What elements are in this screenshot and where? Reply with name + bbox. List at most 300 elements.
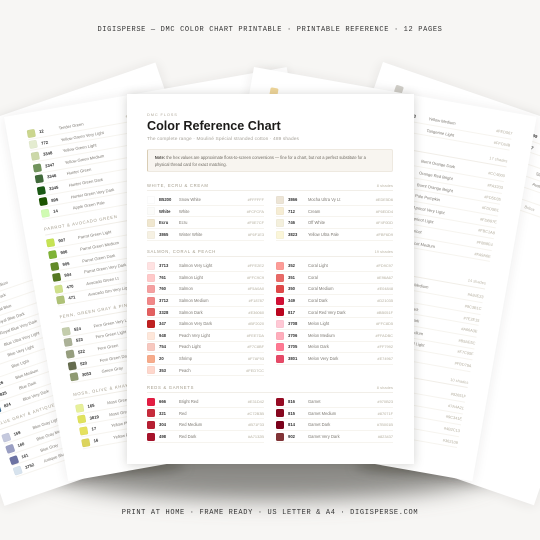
heading: 19 shades	[375, 249, 393, 254]
swatch rows	[520, 131, 540, 218]
left column swatches: #BF2020	[248, 321, 264, 326]
swatch rows: Copper	[397, 292, 411, 299]
panel: inner right page (oranges and golds)	[190, 67, 537, 481]
swatch rows: Golden Browns	[382, 379, 410, 389]
right column swatches: #E96A67	[377, 275, 393, 280]
swatch rows: #FA3203	[487, 182, 503, 190]
right column swatches: Melon Light	[308, 321, 329, 326]
swatch rows: #362109	[443, 437, 458, 445]
swatch rows: 900	[401, 156, 409, 162]
swatch: yellow	[269, 87, 279, 96]
left column swatches: #F7AF93	[248, 356, 264, 361]
left column swatches: 3865	[159, 232, 168, 237]
section: copper and golds	[243, 238, 486, 372]
heading	[243, 237, 487, 289]
swatch rows: 3825	[395, 190, 405, 196]
left column swatches: White	[179, 209, 189, 214]
swatch rows: Blue Gray Medium	[36, 425, 69, 441]
left column swatches: Shrimp	[179, 356, 192, 361]
swatch rows: Fern Green Light	[95, 330, 127, 340]
swatch rows: 161	[21, 452, 29, 459]
left column swatches: Winter White	[179, 232, 202, 237]
section: blues: Blue Ultra Very Light	[3, 329, 40, 346]
swatch rows: #557822	[153, 255, 168, 263]
swatch rows: 300	[358, 399, 366, 405]
swatch rows: Black Browns	[374, 425, 399, 434]
swatch rows: 729	[372, 322, 379, 328]
right column swatches: 3823	[288, 232, 297, 237]
swatch rows: 520	[80, 360, 87, 366]
right column swatches: Coral	[308, 275, 318, 280]
section: tender greens: Yellow Green Medium	[64, 153, 105, 165]
right column swatches: Yellow Ultra Pale	[308, 232, 339, 237]
heading: 8 shades	[377, 384, 393, 390]
heading: 10 shades	[450, 376, 469, 385]
swatch rows: Fern Green Very Light	[93, 317, 134, 328]
section: blues: #BDDDED	[70, 325, 89, 336]
swatch rows: 159	[13, 430, 21, 437]
swatch rows: #7FB335	[148, 232, 164, 240]
callout: note: Note: the hex values are approximate floss-to-screen conversions — fine for a chart, but not a perfect substitute for a	[155, 155, 366, 160]
left column swatches: Red Medium	[179, 422, 202, 427]
section: yellow rows: Yellow Medium	[428, 116, 456, 126]
left column swatches: #C72B3B	[247, 411, 264, 416]
section: yellow rows: #FFC64B	[494, 139, 511, 147]
section: tender greens: 14	[53, 208, 58, 214]
panel: outer right page	[263, 62, 540, 505]
swatch rows: #F8B8E4	[476, 239, 493, 247]
swatch rows: 907	[58, 238, 66, 244]
section: tender greens: 3345	[49, 185, 59, 191]
section: yellow rows: 742	[407, 124, 414, 130]
swatch rows: 905	[62, 261, 70, 267]
right column swatches: Melon Very Dark	[308, 356, 338, 361]
right column swatches: #BB051F	[377, 310, 393, 315]
swatch rows: Apricot	[409, 227, 422, 235]
swatch rows: Pale Pumpkin	[415, 193, 440, 203]
swatch rows: Antique Blue Light	[43, 448, 76, 463]
section: salmon, coral and peach	[147, 249, 393, 376]
section: tender greens: 772	[41, 139, 48, 145]
right column swatches: #87071F	[378, 411, 393, 416]
section: tender greens: Yellow Green Very Light	[60, 130, 104, 142]
right column swatches: #E74967	[377, 356, 393, 361]
left column swatches: Salmon Dark	[179, 310, 203, 315]
swatch rows: 16	[93, 437, 99, 443]
swatch rows: #EFF4A4	[174, 386, 191, 393]
swatch rows: #7E2E15	[463, 315, 480, 323]
right column swatches: 815	[288, 411, 295, 416]
swatch rows: Moss Green Light	[109, 406, 141, 417]
swatch rows: #FDB97E	[480, 216, 497, 224]
right column swatches: Garnet Medium	[308, 411, 336, 416]
section: reds and garnets	[147, 384, 393, 443]
swatch rows: 3341	[391, 213, 401, 219]
swatch rows: Yellow Plum Light	[111, 418, 143, 428]
swatch rows: #FDD5B1	[482, 205, 499, 213]
right column swatches: 816	[288, 399, 295, 404]
heading	[0, 340, 232, 429]
heading: COPPER & GOLDS	[243, 238, 291, 251]
swatch rows: #FD5D35	[484, 194, 501, 201]
swatch rows: 300	[380, 277, 387, 283]
swatch rows: 434	[360, 387, 368, 393]
left column swatches: 347	[159, 321, 166, 326]
section: blues: Blue Light	[11, 358, 29, 368]
left column swatches: 3712	[159, 298, 168, 303]
right column swatches: #F6EDD4	[376, 209, 393, 214]
section: tender greens: Hunter Green	[66, 167, 92, 176]
heading: WHITE, ECRU & CREAM	[147, 182, 209, 188]
right column swatches: 3706	[288, 333, 297, 338]
swatch rows	[62, 309, 186, 384]
swatch rows: 160	[17, 441, 25, 448]
section: tender greens: #D0FBB2	[140, 191, 157, 199]
swatch rows: Burnt Orange Bright	[417, 182, 453, 193]
title: Color Reference Chart	[147, 119, 281, 133]
swatch rows: #FBD79A	[454, 360, 472, 368]
swatch rows: #E5E25A	[178, 409, 195, 416]
section: browns	[226, 337, 469, 448]
left column swatches	[147, 196, 264, 241]
section: blues: #396B91	[88, 369, 104, 379]
swatch rows: Burnt Orange Dark	[421, 159, 455, 170]
right column swatches	[276, 398, 393, 443]
swatch rows: 680	[374, 311, 381, 317]
swatch rows: Light Browns	[380, 391, 404, 400]
section: tender greens: 3346	[47, 173, 57, 180]
section: blues: #13477D	[57, 281, 74, 291]
section: tender greens: #406A3A	[134, 157, 151, 164]
swatch rows: #C7D1DB	[107, 431, 125, 441]
right column swatches: 3708	[288, 321, 297, 326]
right column swatches: 352	[288, 263, 295, 268]
right column swatches	[276, 196, 393, 241]
heading: PARROT & AVOCADO GREEN	[44, 214, 118, 232]
top caption: DIGISPERSE — DMC COLOR CHART PRINTABLE · PRINTABLE REFERENCE · 12 PAGES	[97, 26, 443, 34]
swatch rows: Copper Dark	[395, 303, 419, 312]
section: tender greens: #71935C	[133, 145, 149, 153]
heading: 17 shades	[489, 155, 508, 163]
eyebrow label: DMC FLOSS	[147, 112, 178, 117]
right column swatches: #FD9C97	[376, 263, 393, 268]
swatch rows: 523	[76, 337, 83, 343]
swatch rows: #A66A3E	[461, 326, 478, 334]
section: blues: #0E365C	[64, 303, 81, 313]
swatch rows	[2, 398, 125, 478]
right column swatches: #7B001B	[377, 422, 393, 427]
section: tender greens: Yellow Green Light	[62, 143, 97, 153]
swatch rows: 471	[68, 295, 76, 301]
callout: note	[147, 149, 393, 172]
section: oranges	[265, 116, 508, 262]
swatch rows: Old Gold Dark	[393, 314, 420, 324]
right column swatches: #FFADBC	[375, 333, 393, 338]
heading	[147, 182, 393, 191]
swatch rows: #7A4A21	[448, 403, 464, 410]
left column swatches: 353	[159, 368, 166, 373]
swatch rows	[75, 386, 197, 450]
heading: 5 shades	[285, 272, 302, 280]
section: blues: 824	[3, 401, 11, 408]
right column swatches: #EDE5D6	[376, 197, 393, 202]
section: tender greens: #E4ECD4	[127, 122, 145, 130]
heading	[73, 348, 316, 400]
swatch rows: Parrot Green Light	[78, 230, 112, 240]
section: yellow rows: #FED567	[496, 128, 513, 136]
heading: 6 shades	[270, 184, 287, 192]
swatch rows: Avocado Grn Very Light	[88, 285, 131, 297]
swatch rows: Apricot Medium	[407, 239, 436, 249]
section: blues	[0, 259, 104, 414]
left column swatches: Bright Red	[179, 399, 198, 404]
section: tender greens: Hunter Green Dark	[68, 177, 103, 188]
section: blues: #BDDDED	[66, 314, 85, 325]
left column swatches: #B71F33	[248, 422, 264, 427]
swatch rows: #E0E868	[177, 397, 193, 405]
right column swatches: Coral Dark	[308, 298, 328, 303]
swatch rows: Parrot Green Medium	[80, 240, 119, 252]
right column swatches: Cream	[308, 209, 320, 214]
swatch rows: Parrot Green Very Dark	[84, 262, 127, 275]
left column swatches: Ecru	[159, 220, 168, 225]
left column swatches: Peach Light	[179, 344, 201, 349]
section: tender greens	[26, 111, 157, 220]
swatch rows: #B9AE5C	[458, 338, 476, 345]
heading: 14 shades	[467, 277, 486, 286]
left column swatches: Salmon	[179, 286, 193, 291]
swatch rows: Avocado Green Lt	[86, 275, 119, 286]
section: white, ecru and cream	[147, 182, 393, 241]
left column swatches	[147, 262, 264, 376]
left column swatches: Snow White	[179, 197, 201, 202]
right column swatches: 3866	[288, 197, 297, 202]
heading	[147, 384, 393, 393]
swatch rows: 606	[399, 167, 407, 173]
heading: FERN, GREEN GRAY & PINE	[59, 302, 132, 320]
swatch rows: 17	[91, 426, 97, 432]
left column swatches: 754	[159, 344, 166, 349]
right column swatches: #D21035	[377, 298, 393, 303]
right column swatches: #823437	[378, 434, 393, 439]
swatch rows: #FA9A6E	[474, 251, 491, 259]
swatch rows: Green Gray	[101, 365, 123, 374]
swatch rows: 906	[60, 249, 68, 255]
swatch rows: #9CA482	[169, 354, 186, 362]
section: tender greens: #1B5300	[139, 179, 155, 187]
swatch rows: #969E7E	[165, 332, 182, 339]
swatch rows: #666D4F	[167, 343, 184, 351]
swatch rows: 522	[78, 349, 85, 355]
swatch rows: 3371	[354, 422, 364, 428]
swatch rows: #C7CAD7	[96, 398, 114, 408]
left column swatches: 304	[159, 422, 166, 427]
right column swatches: #FFC8D5	[376, 321, 393, 326]
swatch rows: Old Gold Light	[387, 349, 414, 358]
section: blues: Blue Very Dark	[22, 388, 49, 401]
heading: 4 shades	[214, 341, 231, 351]
swatch rows: 3819	[89, 414, 99, 420]
swatch rows: Apricot Very Light	[413, 205, 445, 215]
right column swatches: Garnet Very Dark	[308, 434, 340, 439]
swatch: gray	[394, 85, 404, 95]
swatch rows: Fern Green Dark	[99, 352, 130, 363]
left column swatches: #FFE2E2	[248, 263, 264, 268]
left column swatches: #E31D42	[248, 399, 264, 404]
right column swatches: Melon Dark	[308, 344, 329, 349]
swatch rows: Blue Gray	[40, 442, 58, 452]
right column swatches: Coral Light	[308, 263, 328, 268]
right column swatches: 349	[288, 298, 295, 303]
bottom caption: PRINT AT HOME · FRAME READY · US LETTER & A4 · DIGISPERSE.COM	[122, 509, 418, 517]
section: fern, green gray and pine	[59, 272, 302, 384]
section: blues: Blue Dark	[18, 380, 37, 390]
swatch rows	[354, 376, 466, 448]
section: tender greens: Apple Green Pale	[72, 200, 105, 211]
right column swatches: Off White	[308, 220, 325, 225]
left column swatches: B5200	[159, 197, 171, 202]
right column swatches: #970B23	[377, 399, 393, 404]
left column swatches: #F6F1E3	[248, 232, 264, 237]
swatch rows: 400	[376, 299, 383, 306]
left column swatches: Peach	[179, 368, 191, 373]
right column swatches: 712	[288, 209, 295, 214]
left column swatches: Salmon Very Dark	[179, 321, 212, 326]
swatch rows: Old Gold Medium	[391, 326, 424, 336]
swatch rows: Yellow Plum	[113, 431, 136, 440]
right column swatches	[276, 262, 393, 365]
swatch rows: 470	[66, 283, 74, 290]
right column swatches: 3801	[288, 356, 297, 361]
swatch rows: 3799	[528, 131, 538, 139]
swatch rows: Blue Gray Light	[32, 416, 60, 430]
heading	[43, 183, 287, 235]
heading	[264, 115, 508, 167]
swatch rows: Parrot Green Dark	[82, 253, 116, 263]
left column swatches: #F18787	[249, 298, 264, 303]
swatch rows: 904	[64, 272, 72, 278]
swatch rows: #C7E666	[145, 221, 162, 228]
section: tender greens: Hunter Green Very Dark	[70, 187, 115, 199]
left column swatches: #A7132B	[248, 434, 264, 439]
left column swatches: 321	[159, 411, 166, 416]
swatch rows: #AEBF79	[155, 278, 172, 286]
swatch rows: 608	[397, 178, 405, 184]
right column swatches: 746	[288, 220, 295, 225]
left column swatches: 498	[159, 434, 166, 439]
swatch rows: 524	[74, 326, 81, 332]
section: blues: Royal Blue Very Dark	[0, 318, 38, 335]
left column swatches: Ecru	[179, 220, 187, 225]
section: yellow rows: 743	[409, 113, 416, 119]
left column swatches: #F5A0A0	[248, 286, 264, 291]
swatch rows: #A84E23	[467, 292, 484, 300]
section: moss, olive and khaki	[73, 349, 316, 450]
right column swatches: 814	[288, 422, 295, 427]
swatch rows: 3340	[389, 224, 399, 231]
section: tender greens: 3348	[43, 150, 53, 157]
left column swatches: #FFFFFF	[248, 197, 264, 202]
panel: main color reference page	[127, 94, 414, 464]
section: blues: #748EB6	[49, 259, 66, 269]
swatch rows: #CC4B00	[488, 171, 505, 179]
swatch rows: #ABB197	[163, 320, 180, 328]
left column swatches: #F0E7CF	[247, 220, 264, 225]
heading: SALMON, CORAL & PEACH	[147, 249, 216, 254]
section: tender greens: 12	[39, 128, 44, 134]
swatch rows: #FBC1A8	[478, 228, 495, 236]
section: blues: #466A8E	[53, 270, 70, 280]
heading	[147, 248, 393, 257]
swatch rows: 3820	[370, 334, 380, 340]
section: yellow rows: Tangerine Light	[426, 128, 455, 137]
section: blues: Blue Very Light	[7, 344, 35, 357]
left column swatches: Salmon Medium	[179, 298, 209, 303]
swatch rows: 3787	[524, 142, 534, 150]
heading: 4 shades	[299, 349, 316, 357]
right column swatches: Garnet Dark	[308, 422, 330, 427]
swatch rows: 433	[362, 376, 370, 382]
right column swatches: 350	[288, 286, 295, 291]
right column swatches: #FF7992	[377, 344, 393, 349]
right column swatches: 351	[288, 275, 295, 280]
right column swatches: Coral Medium	[308, 286, 333, 291]
right column swatches: 3705	[288, 344, 297, 349]
swatch rows: Moss Green Very Light	[107, 393, 149, 405]
swatch rows: Apricot Light	[411, 216, 434, 225]
subtitle: The complete range · Mouliné Spécial stranded cotton · 489 shades	[147, 137, 299, 142]
swatch rows: Old Gold Med Light	[389, 337, 425, 348]
swatch rows: Orange Red Bright	[419, 170, 453, 181]
heading: MOSS, OLIVE & KHAKI	[73, 382, 131, 397]
swatch rows: #4B2C13	[444, 426, 460, 433]
section: tender greens: Tender Green	[58, 121, 84, 131]
section: blues: #47819F	[84, 358, 100, 368]
swatch rows: 301	[378, 288, 385, 294]
panel: outer left page (blues)	[0, 62, 276, 505]
right column swatches: 902	[288, 434, 295, 439]
left column swatches: #FED7CC	[246, 368, 264, 373]
heading: BROWNS	[226, 337, 250, 346]
swatch rows: #D9D550	[180, 420, 197, 428]
left column swatches	[147, 398, 264, 443]
swatch rows: 3822	[368, 345, 378, 352]
left column swatches: Peach Very Light	[179, 333, 210, 338]
left column swatches: #F7C8BF	[247, 344, 264, 349]
left column swatches: 761	[159, 275, 166, 280]
left column swatches: #FCFCFA	[247, 209, 264, 214]
left column swatches: 948	[159, 333, 166, 338]
callout: note: physical thread card for exact matching.	[155, 162, 227, 167]
swatch rows: Mahogany Browns	[378, 402, 412, 413]
right column swatches: Mocha Ultra Vy Lt	[308, 197, 340, 202]
left column swatches: 3328	[159, 310, 168, 315]
right column swatches: #F4F0DD	[376, 220, 393, 225]
section: parrot and avocado green	[44, 184, 287, 306]
section: yellow rows	[407, 113, 513, 150]
left column swatches: 20	[159, 356, 164, 361]
heading: 8 shades	[377, 182, 393, 188]
swatch rows: #787F98	[105, 420, 122, 429]
right column swatches: #FBF6D9	[376, 232, 393, 237]
right column swatches: Melon Medium	[308, 333, 335, 338]
swatch rows: Copper Medium	[399, 280, 429, 290]
right column swatches: Garnet	[308, 399, 321, 404]
right column swatches: Coral Red Very Dark	[308, 310, 346, 315]
swatch rows: 3341	[387, 235, 397, 242]
right column swatches: 817	[288, 310, 295, 315]
left column swatches: Salmon Light	[179, 275, 203, 280]
